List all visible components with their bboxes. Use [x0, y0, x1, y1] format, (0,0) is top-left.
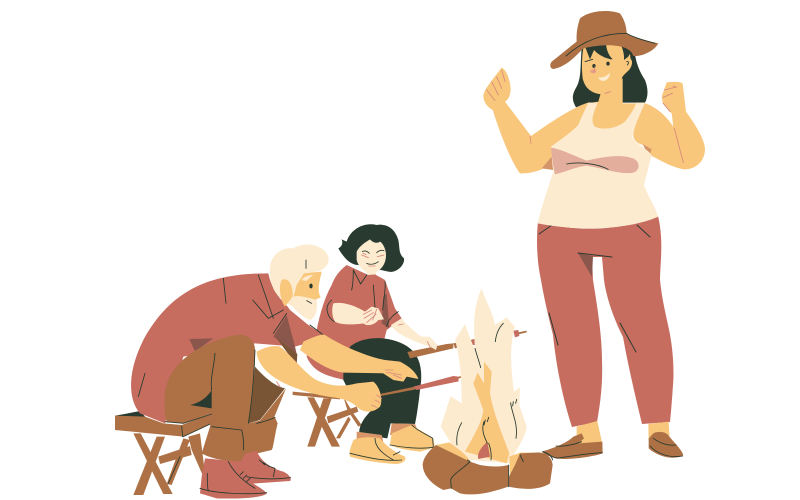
woman standing [483, 11, 705, 459]
red core [478, 442, 490, 459]
woman's pants [537, 216, 673, 427]
near boot [200, 458, 267, 499]
far leg [248, 367, 285, 423]
lower arm [257, 346, 381, 412]
fringe [585, 43, 635, 60]
campfire and hot dogs [413, 288, 553, 494]
girl [293, 224, 453, 464]
girl's hair [338, 224, 404, 272]
flame strokes [457, 323, 517, 460]
girl and old man [115, 224, 453, 499]
far boot [233, 451, 291, 485]
girl's pants [343, 338, 421, 438]
ear [623, 57, 632, 73]
woman's face [582, 42, 631, 94]
tank top [538, 103, 658, 228]
orange flames [465, 362, 509, 463]
girl's right arm [391, 318, 437, 350]
old man's stick [380, 387, 416, 396]
upper fork tip [513, 330, 519, 337]
girl's neck [363, 268, 377, 282]
girl's shoes [357, 423, 420, 442]
pale flames [441, 288, 527, 463]
woman's upper body [483, 11, 705, 228]
upper stick [453, 339, 473, 348]
eyes and brows [585, 57, 628, 65]
old man's beard [292, 296, 317, 320]
woman's hat [550, 11, 658, 69]
girl's shirt [307, 265, 402, 380]
left arm [483, 68, 610, 173]
old man's stool [115, 412, 212, 437]
upper arm [300, 335, 418, 382]
pink wrap band [551, 148, 639, 174]
old man [115, 245, 418, 499]
right arm [633, 82, 705, 169]
neck and chest [587, 78, 643, 130]
rocks [423, 445, 470, 490]
shirt [131, 273, 323, 423]
woman's shoes [542, 421, 683, 459]
girl's stool [293, 392, 362, 447]
lower hot dog and fork [413, 376, 459, 390]
underarm shade [542, 144, 652, 170]
old man's hair [270, 245, 329, 307]
far cuff [243, 417, 278, 457]
old man's face [293, 272, 322, 301]
girl's left arm and hands [332, 303, 384, 325]
old man's ear [280, 279, 293, 307]
fists [487, 70, 683, 163]
orange embers [436, 442, 535, 477]
girl's stick [407, 343, 453, 358]
near leg [164, 335, 255, 462]
woman's hair [573, 43, 647, 107]
girl's face [357, 239, 386, 273]
